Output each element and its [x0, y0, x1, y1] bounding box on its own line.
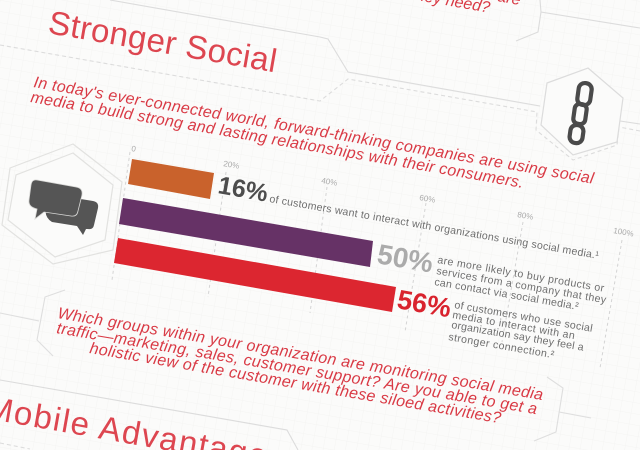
intro text: media to build strong and lasting relationships with their consumers.: [29, 89, 525, 192]
bar: 56%: [114, 238, 396, 312]
question callout brackets: [0, 290, 591, 441]
bar: 50%: [119, 198, 373, 267]
stat: 50%: can contact via social media.²: [433, 276, 580, 313]
axis labels: 100%: [613, 226, 634, 239]
axis labels: 0: [131, 144, 137, 154]
stat: 56%: of customers who use social: [453, 299, 593, 335]
stat: 50%: are more likely to buy products or: [436, 254, 606, 295]
stat: 56%: [395, 284, 593, 361]
axis labels: 60%: [419, 193, 436, 205]
bar chart: [112, 144, 634, 368]
bar: 16%: [128, 159, 214, 199]
intro text: In today's ever-connected world, forward-thinking companies are using social: [32, 74, 595, 188]
stat: 16%: 16%: [216, 171, 270, 208]
stat: 56%: 56%: [395, 284, 453, 323]
title: Stronger Social: Stronger Social: [46, 3, 280, 79]
axis labels: 20%: [223, 159, 240, 171]
stat: 16%: [216, 171, 600, 262]
icon: chat bubbles hexagon: [2, 144, 122, 264]
axis labels: 40%: [321, 176, 338, 188]
axis gridlines: [112, 152, 622, 368]
stat: 50%: [375, 238, 608, 313]
stat: 50%: 50%: [375, 238, 436, 279]
icon: chain: [569, 82, 592, 144]
axis labels: [131, 144, 634, 239]
stat: 56%: stronger connection.²: [447, 331, 555, 361]
axis labels: 80%: [517, 210, 534, 222]
icon: chat bubbles: [29, 180, 98, 235]
stat: 50%: services from a company that they: [435, 265, 608, 306]
stat: 16%: of customers want to interact with organizations using social media.¹: [268, 193, 600, 262]
question callout text: Which groups within your organization are monitoring social media: [56, 305, 544, 404]
question callout text: holistic view of the customer with these siloed activities?: [88, 340, 502, 427]
stat: 56%: media to interact with an: [451, 309, 576, 342]
question callout text: traffic—marketing, sales, customer support? Are you able to get a: [55, 320, 538, 418]
icon: chain link hexagon: [541, 68, 623, 155]
stat: 56%: organization say they feel a: [450, 319, 585, 354]
